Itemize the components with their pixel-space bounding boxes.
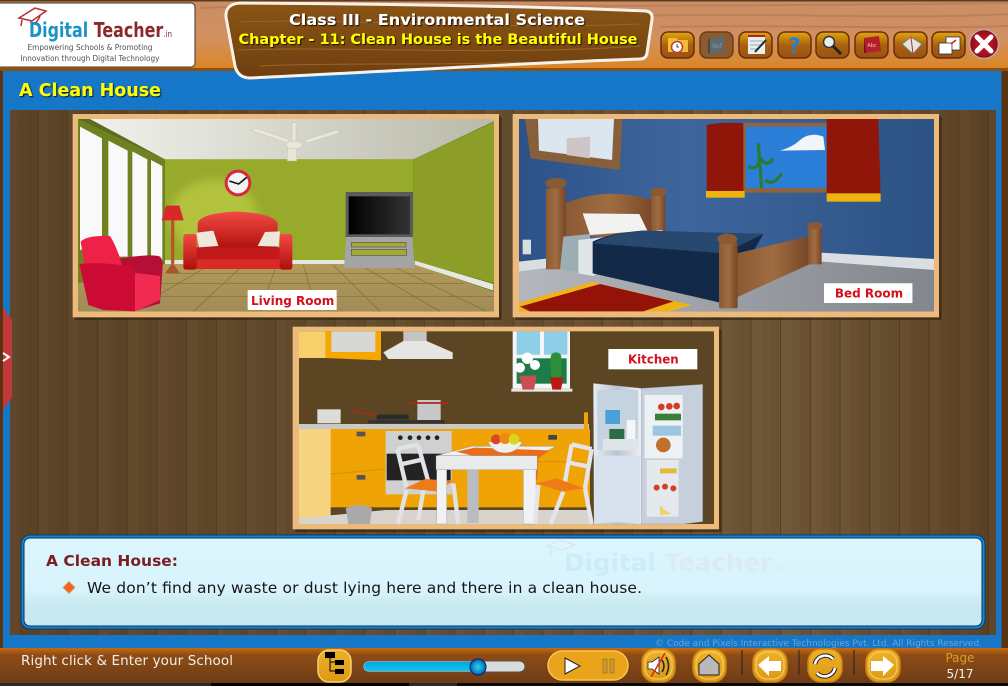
floor <box>519 262 934 311</box>
wall cabinet <box>299 331 381 360</box>
button: play and pause <box>548 651 628 680</box>
button: reference book <box>700 32 733 58</box>
button: chapter index <box>318 650 351 682</box>
rug <box>519 282 692 311</box>
chair left <box>397 444 458 524</box>
top wooden header <box>0 0 1008 71</box>
counter and cabinets <box>299 412 590 524</box>
cooker hood <box>383 331 453 359</box>
icon: wall clock <box>225 170 251 196</box>
skirting <box>519 253 934 271</box>
windows <box>80 127 162 260</box>
oven <box>386 431 452 494</box>
window <box>742 123 830 193</box>
button: home <box>693 649 726 682</box>
icon: graduation cap <box>19 8 46 26</box>
button: help <box>778 32 811 58</box>
panel: bed room <box>513 114 942 320</box>
button: notes <box>739 32 772 58</box>
label: living room <box>248 290 337 310</box>
ceiling <box>90 119 494 159</box>
button: previous <box>753 649 787 682</box>
button: dictionary <box>855 32 888 58</box>
icon: sofa <box>183 212 292 270</box>
back wall <box>165 159 413 263</box>
label: living room: Living Room <box>251 294 334 308</box>
label: bed room: Bed Room <box>835 287 903 301</box>
info heading: A Clean House: <box>46 552 178 570</box>
bottom control bar <box>0 648 1008 686</box>
icon: television <box>344 192 415 268</box>
logo wordmark: Digital Teacher.in <box>29 18 172 42</box>
wall mirror <box>525 119 622 170</box>
right wall <box>413 122 494 283</box>
chapter heading: Class III - Environmental Science <box>289 11 585 29</box>
watermark logo: Digital Teacher .in <box>564 549 785 577</box>
logo tagline: Innovation through Digital Technology <box>20 54 160 63</box>
copyright: © Code and Pixels Interactive Technologies Pvt. Ltd. All Rights Reserved. <box>655 639 982 649</box>
chair right <box>535 444 592 524</box>
icon: floor lamp <box>162 206 184 273</box>
button: open book <box>894 32 927 58</box>
fridge <box>593 383 703 524</box>
progress slider <box>363 659 525 675</box>
floor <box>78 264 494 311</box>
left window wall <box>78 119 165 297</box>
panel: living room <box>73 114 502 320</box>
page counter <box>945 651 975 681</box>
title plaque <box>226 3 652 78</box>
icon: armchair <box>79 236 163 311</box>
skirting <box>165 260 493 291</box>
button: reload <box>808 649 842 682</box>
button: help: ? <box>788 34 801 58</box>
fruit bowl <box>488 433 522 453</box>
window with plants <box>511 331 572 392</box>
bullet icon <box>63 582 75 594</box>
curtains <box>706 119 881 202</box>
school prompt: Right click & Enter your School <box>21 653 233 669</box>
label: kitchen: Kitchen <box>628 353 679 367</box>
button: reference book: Ref <box>712 43 723 50</box>
dustbin <box>346 505 372 524</box>
chapter heading: Chapter - 11: Clean House is the Beautiful House <box>238 32 638 48</box>
panel: kitchen <box>293 327 722 532</box>
label: bed room <box>824 283 913 303</box>
icon: bed <box>545 178 823 308</box>
button: folder clock <box>661 32 694 58</box>
logo tagline <box>20 43 160 63</box>
button: dictionary: Abc <box>867 43 877 49</box>
button: next <box>866 649 900 682</box>
outlet <box>523 240 531 254</box>
wooden board <box>10 110 996 635</box>
dining table <box>436 446 556 524</box>
label: kitchen <box>608 349 697 369</box>
icon: ceiling fan <box>250 123 340 161</box>
panel: info text box <box>21 535 985 629</box>
slide heading: A Clean House <box>19 80 161 101</box>
toolbar buttons <box>661 30 998 58</box>
page counter: Page <box>945 651 975 665</box>
logo panel <box>0 3 195 67</box>
button: search <box>816 32 849 58</box>
button: close <box>970 30 998 58</box>
page counter: 5/17 <box>947 667 973 681</box>
side tab <box>3 307 12 410</box>
chapter heading <box>238 11 638 48</box>
stove items <box>317 400 449 423</box>
button: resize window <box>932 32 965 58</box>
info text: We don’t find any waste or dust lying here and there in a clean house. <box>87 579 642 597</box>
button: mute <box>642 649 675 682</box>
logo tagline: Empowering Schools & Promoting <box>28 43 152 52</box>
